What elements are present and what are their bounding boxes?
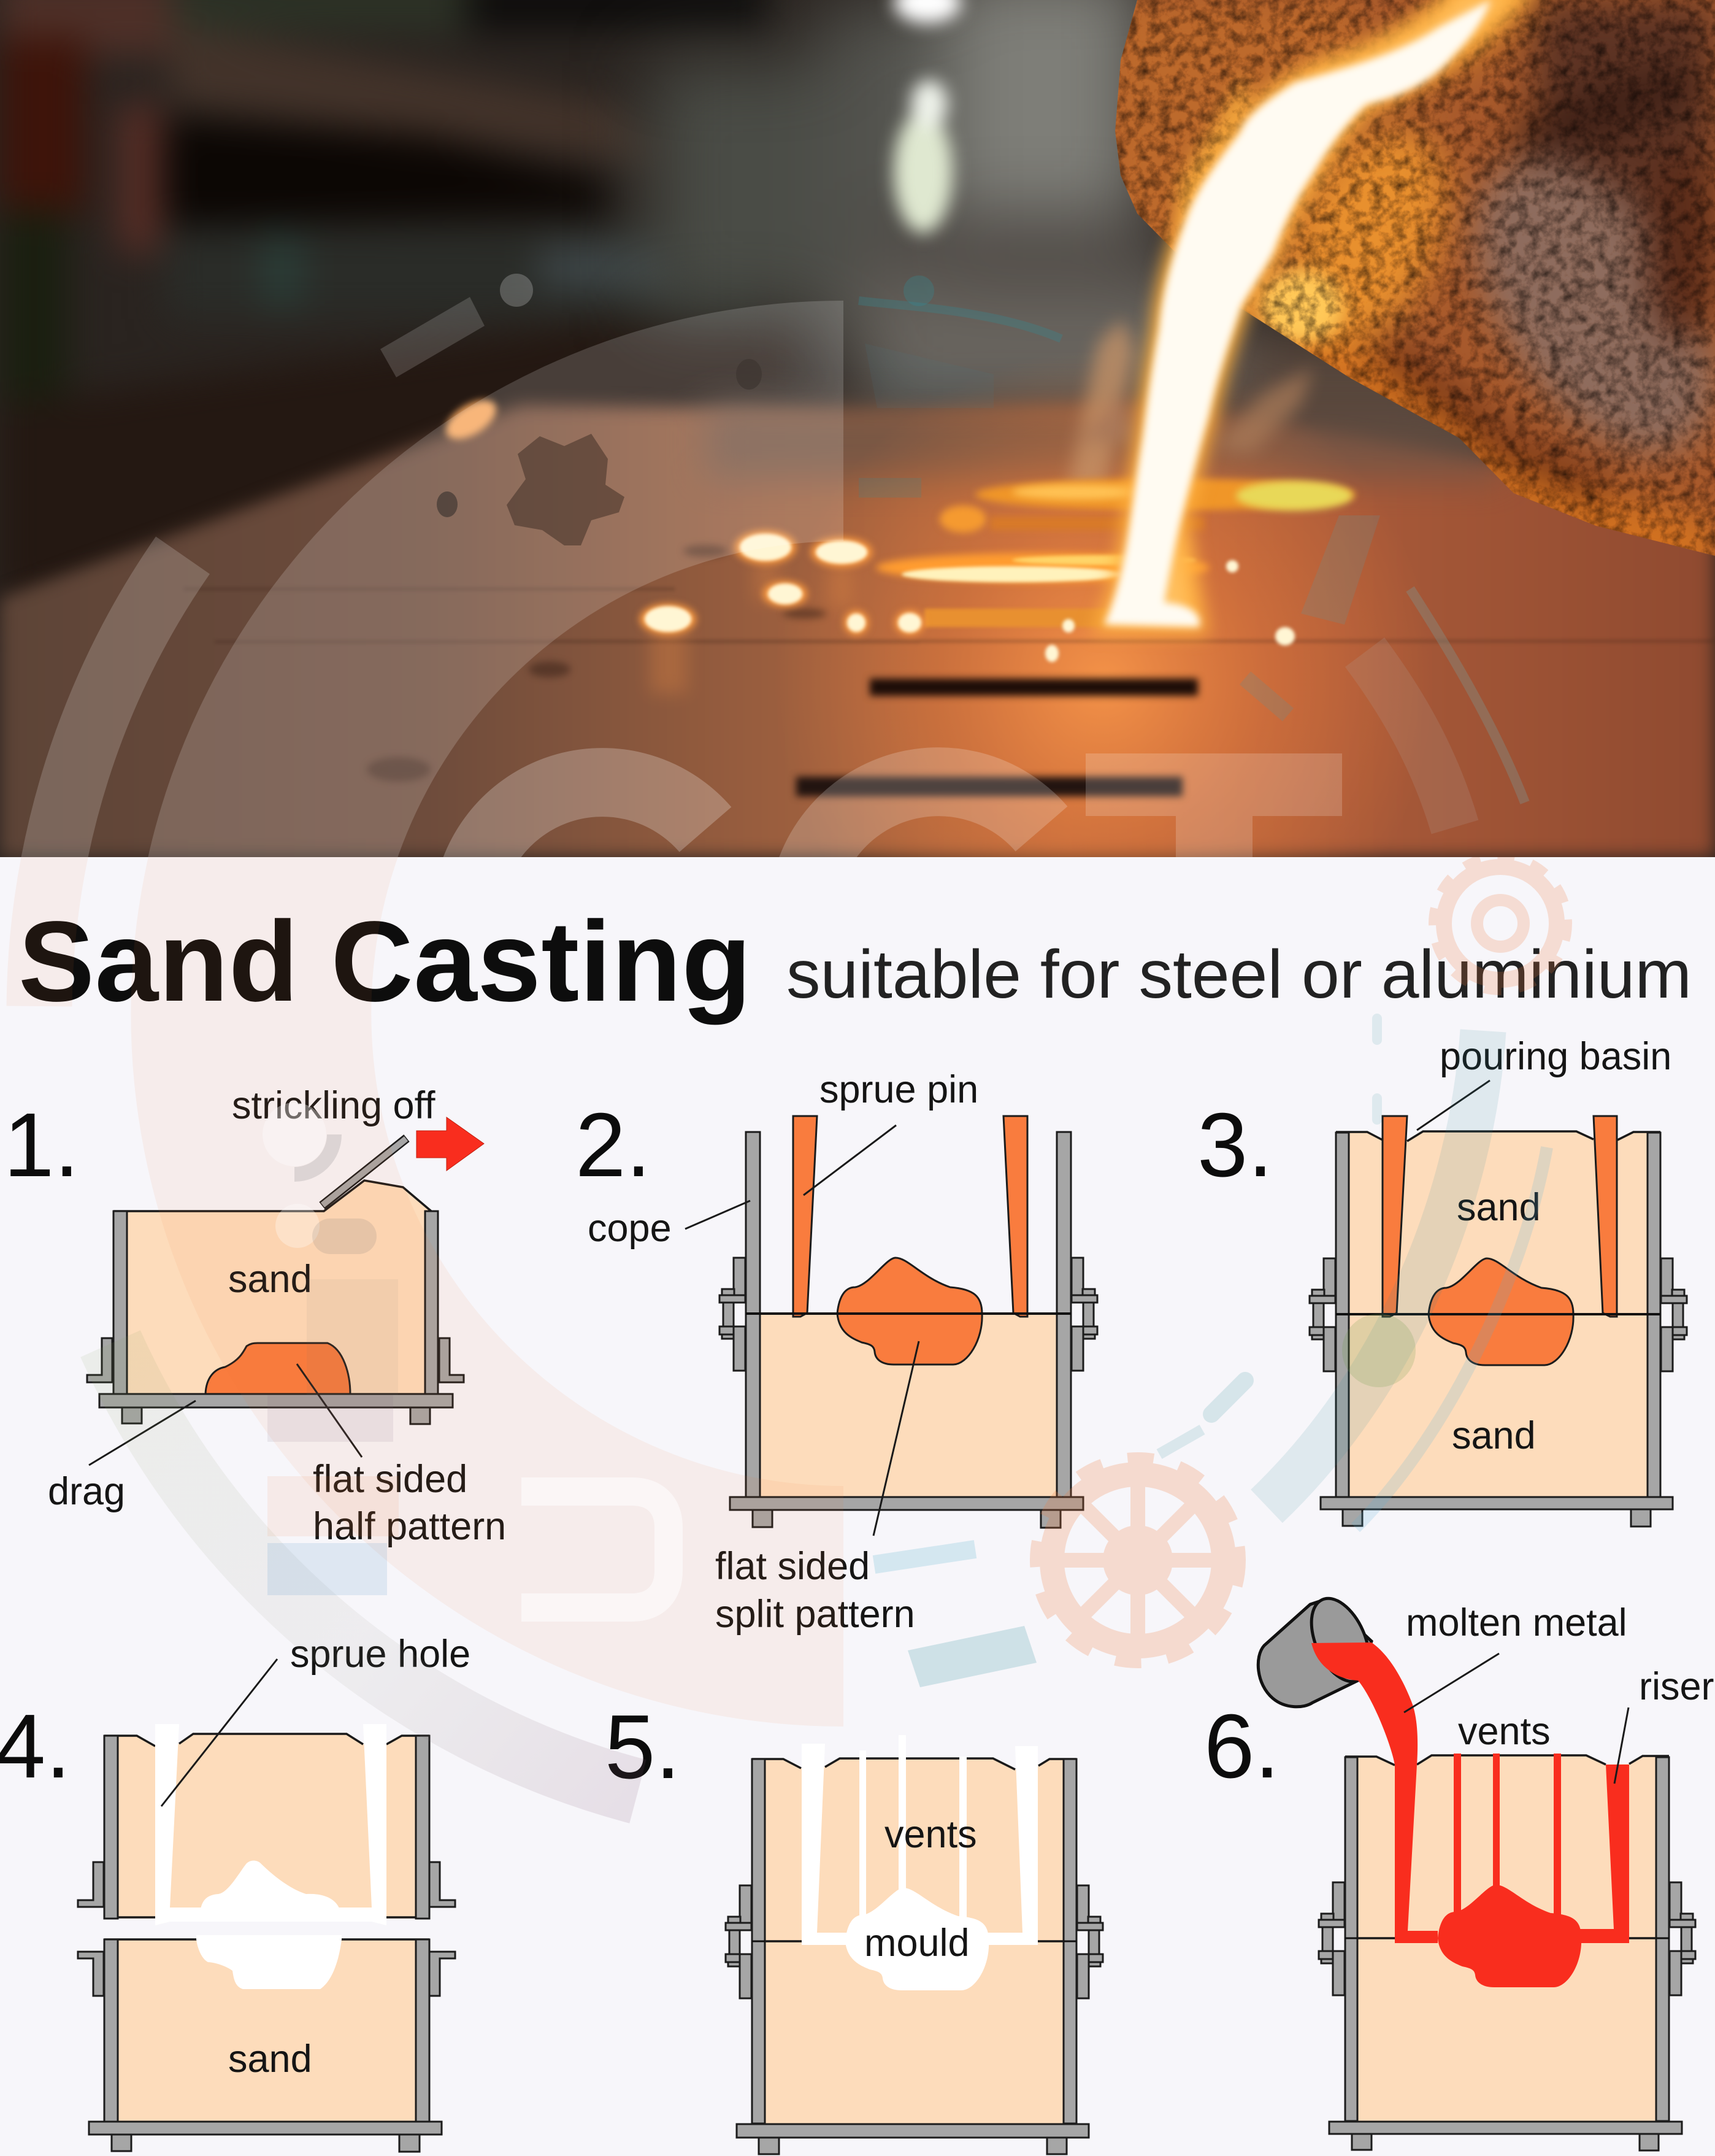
step number: 6. bbox=[1204, 1696, 1280, 1797]
sand bbox=[1349, 1131, 1648, 1497]
labels: cope bbox=[588, 1207, 672, 1250]
sand outline bbox=[1336, 1131, 1660, 1141]
labels bbox=[1440, 1035, 1671, 1457]
title: Sand Casting bbox=[18, 898, 751, 1025]
sparks of molten metal bbox=[439, 392, 1295, 693]
flask walls bbox=[113, 1211, 438, 1394]
sand bbox=[765, 1758, 1064, 2123]
leader line bbox=[161, 1659, 277, 1806]
photo backdrop bbox=[0, 0, 1715, 857]
side brackets bbox=[87, 1338, 464, 1382]
faint logo watermark over the lower section bbox=[39, 301, 1567, 1792]
ladle bbox=[1258, 1590, 1381, 1707]
labels bbox=[228, 1633, 470, 2081]
photo: molten metal pouring from a ladle bbox=[0, 0, 1715, 857]
molten metal stream bbox=[1104, 0, 1525, 627]
gear, top right bbox=[1434, 857, 1567, 990]
flask walls bbox=[104, 1736, 429, 2122]
labels: sand bbox=[1452, 1414, 1536, 1457]
sprue holes and runners bbox=[155, 1724, 386, 1925]
split pattern bbox=[837, 1258, 982, 1365]
leader line bbox=[1417, 1080, 1490, 1130]
upper sand outline bbox=[104, 1734, 429, 1917]
floor streaks and scorch marks bbox=[184, 545, 1715, 782]
panel 4: flask halves separated, pattern removed bbox=[0, 1633, 470, 2152]
flask walls bbox=[746, 1132, 1071, 1497]
flask walls bbox=[1336, 1133, 1660, 1497]
labels: drag bbox=[48, 1470, 125, 1513]
sand outline bbox=[752, 1758, 1076, 1941]
strickle bar bbox=[322, 1138, 407, 1206]
flask walls bbox=[752, 1759, 1076, 2123]
half pattern bbox=[205, 1343, 350, 1394]
step number: 3. bbox=[1197, 1095, 1273, 1196]
gear bbox=[1037, 1460, 1238, 1661]
gray out-of-focus machinery bbox=[650, 0, 1472, 423]
subtitle: suitable for steel or aluminium bbox=[786, 936, 1692, 1012]
side brackets bbox=[78, 1862, 455, 1996]
flask walls bbox=[1345, 1757, 1669, 2121]
clamps bbox=[1319, 1882, 1695, 1995]
labels bbox=[864, 1813, 977, 1965]
dark slots in the floor bbox=[870, 679, 1198, 696]
upper mould cavity bbox=[201, 1860, 340, 1914]
background light spots bbox=[894, 0, 961, 233]
panel 1: strickling off the drag bbox=[4, 1084, 506, 1548]
step number: 2. bbox=[575, 1095, 651, 1196]
labels: molten metal bbox=[1406, 1601, 1627, 1644]
blurred foundry background bbox=[0, 0, 797, 614]
upper sand bbox=[118, 1734, 416, 1919]
watermark shapes over the photo bbox=[39, 274, 1525, 1014]
labels bbox=[48, 1084, 506, 1548]
arrow: strickling direction bbox=[416, 1117, 484, 1171]
step number: 1. bbox=[4, 1095, 79, 1196]
page background bbox=[0, 857, 1715, 2156]
panel 3: cope rammed with sand bbox=[1197, 1035, 1687, 1527]
warm glow on the floor bbox=[810, 372, 1394, 857]
sand bbox=[1357, 1755, 1656, 2121]
labels: half pattern bbox=[313, 1505, 506, 1548]
labels: sprue hole bbox=[290, 1633, 470, 1676]
labels: strickling off bbox=[232, 1084, 435, 1127]
clamps bbox=[719, 1258, 1097, 1371]
labels: sand bbox=[1457, 1186, 1541, 1229]
base plate with feet bbox=[1329, 2122, 1682, 2150]
split pattern bbox=[1429, 1258, 1573, 1365]
labels: sand bbox=[228, 1258, 312, 1301]
muted band at the far edge of the floor bbox=[705, 405, 1503, 479]
labels: vents bbox=[884, 1813, 977, 1856]
lower mould cavity bbox=[196, 1935, 342, 1989]
glowing mould openings bbox=[876, 479, 1356, 627]
base plate with feet bbox=[1321, 1497, 1673, 1527]
parting line bbox=[746, 1312, 1071, 1315]
clamps bbox=[1310, 1258, 1687, 1371]
blurred sparks behind the stream bbox=[1067, 319, 1313, 491]
labels: mould bbox=[864, 1922, 970, 1965]
sand outline bbox=[1345, 1755, 1669, 1938]
labels: vents bbox=[1458, 1710, 1551, 1753]
labels: split pattern bbox=[715, 1593, 915, 1636]
vents bbox=[859, 1735, 967, 1922]
sand bbox=[760, 1314, 1057, 1497]
base plate with feet bbox=[737, 2124, 1089, 2154]
sprue pins bbox=[793, 1116, 1027, 1317]
panel 6: pouring molten metal bbox=[1204, 1590, 1714, 2150]
base plate with feet bbox=[89, 2122, 442, 2152]
lower sand bbox=[118, 1939, 416, 2122]
parting line bbox=[1336, 1313, 1660, 1315]
labels: sand bbox=[228, 2038, 312, 2081]
labels bbox=[588, 1068, 978, 1636]
step number: 5. bbox=[605, 1696, 680, 1798]
labels: riser bbox=[1639, 1665, 1714, 1708]
panel 5: mould reassembled with vents bbox=[605, 1696, 1103, 2154]
sand with excess mound bbox=[113, 1180, 438, 1394]
leader lines bbox=[89, 1364, 362, 1465]
lower sand outline bbox=[104, 1938, 429, 1941]
panel 2: cope with sprue pins and split pattern bbox=[575, 1068, 1097, 1636]
ladle bbox=[1104, 0, 1715, 556]
labels: flat sided bbox=[715, 1545, 870, 1588]
labels: sprue pin bbox=[819, 1068, 978, 1111]
mould cavity bbox=[845, 1888, 989, 1990]
labels: flat sided bbox=[313, 1458, 467, 1501]
labels bbox=[1406, 1601, 1714, 1753]
base plate with feet bbox=[99, 1394, 453, 1424]
sprue pins bbox=[1383, 1116, 1617, 1317]
clamps bbox=[726, 1885, 1103, 1998]
floor of the foundry bbox=[0, 405, 1715, 857]
molten metal stream, sprue, riser and casting bbox=[1311, 1642, 1629, 1987]
sand outline bbox=[113, 1180, 431, 1211]
title block bbox=[18, 898, 1692, 1025]
sprue holes and runners bbox=[802, 1744, 1038, 1945]
leader lines bbox=[1404, 1654, 1629, 1784]
base plate with feet bbox=[730, 1497, 1083, 1528]
labels: pouring basin bbox=[1440, 1035, 1671, 1078]
leader lines bbox=[685, 1125, 919, 1536]
